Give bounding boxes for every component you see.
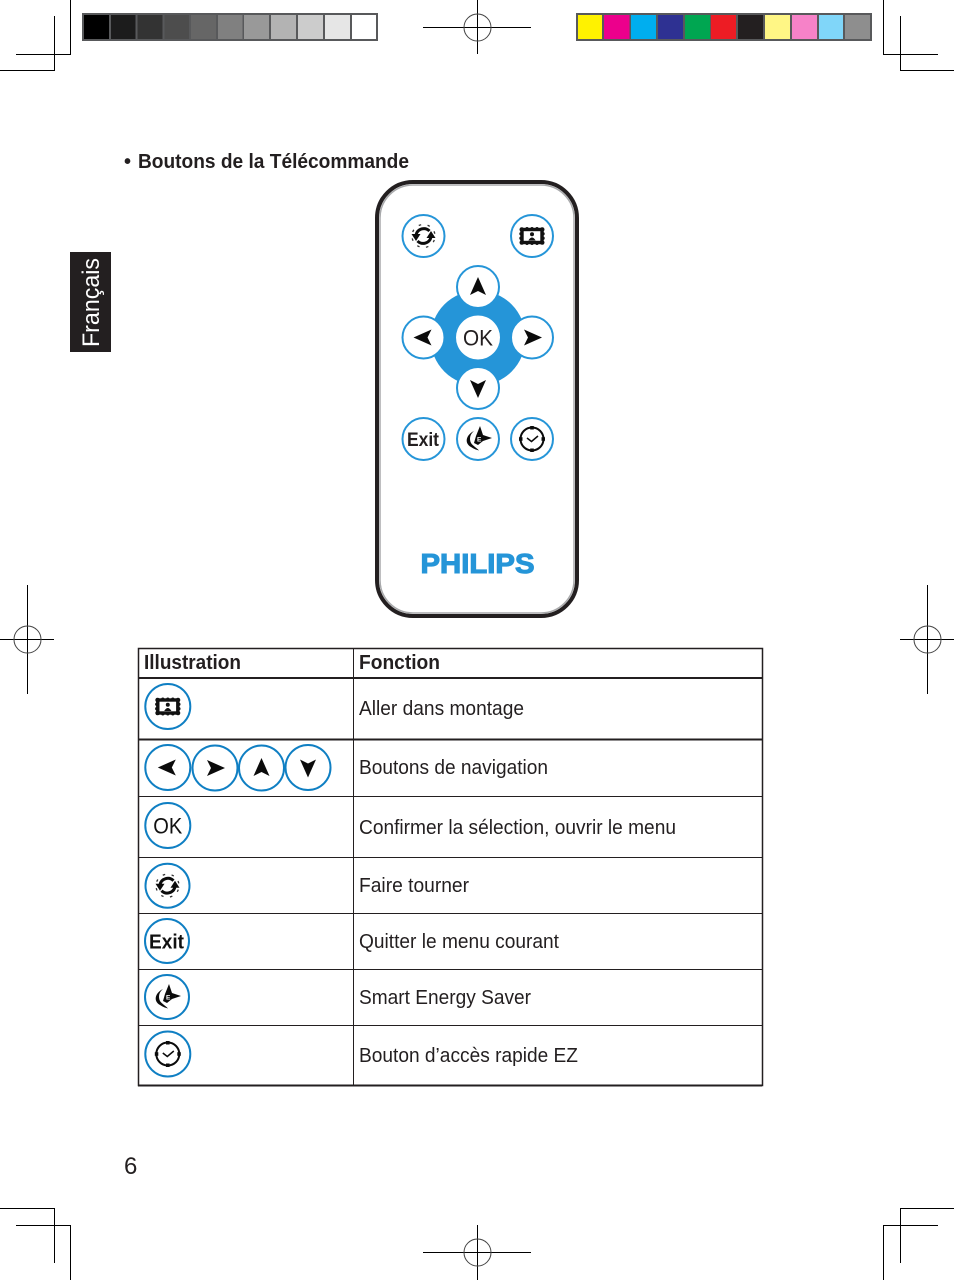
button: OK [456,316,500,360]
row: OK [145,803,676,848]
grayscale calibration bar [82,13,378,41]
button: down [457,367,499,409]
function table [138,648,762,1086]
row: exit: Quitter le menu courant [359,931,559,953]
remote control [377,182,577,616]
table grid [138,648,762,1086]
button: smart energy saver [457,418,499,460]
row: EZ quick access: Bouton d’accès rapide EZ [359,1045,578,1067]
section heading: • [124,151,131,173]
row: OK: OK [153,814,182,838]
button: exit: Exit [407,429,439,451]
row: smart energy saver: Smart Energy Saver [359,987,531,1009]
row: photo montage [145,684,524,729]
button: exit [402,418,444,460]
table header: Fonction [359,652,440,674]
row: OK: Confirmer la sélection, ouvrir le menu [359,817,676,839]
colour calibration bar [576,13,872,41]
row: exit [145,919,559,963]
button: OK: OK [463,326,493,350]
remote body [377,182,577,616]
button: photo frame [511,215,553,257]
button: clock [511,418,553,460]
table header: Illustration [144,652,241,674]
table header [144,652,440,674]
button: up [457,266,499,308]
language side tab [70,252,111,352]
row: rotate [146,864,469,908]
button: left [402,316,444,358]
row: navigation [145,745,548,790]
Philips logo: PHILIPS [420,548,534,579]
row: navigation: Boutons de navigation [359,757,548,779]
row: EZ quick access [145,1032,578,1076]
button: right [511,316,553,358]
row: rotate: Faire tourner [359,875,469,897]
button: rotate [402,215,444,257]
navigation disc [430,290,526,386]
row: smart energy saver [145,975,531,1019]
row: exit: Exit [149,930,184,954]
section heading: Boutons de la Télécommande [138,151,409,173]
row: photo montage: Aller dans montage [359,698,524,720]
page number: 6 [124,1153,137,1180]
language side tab: Français [78,258,105,347]
